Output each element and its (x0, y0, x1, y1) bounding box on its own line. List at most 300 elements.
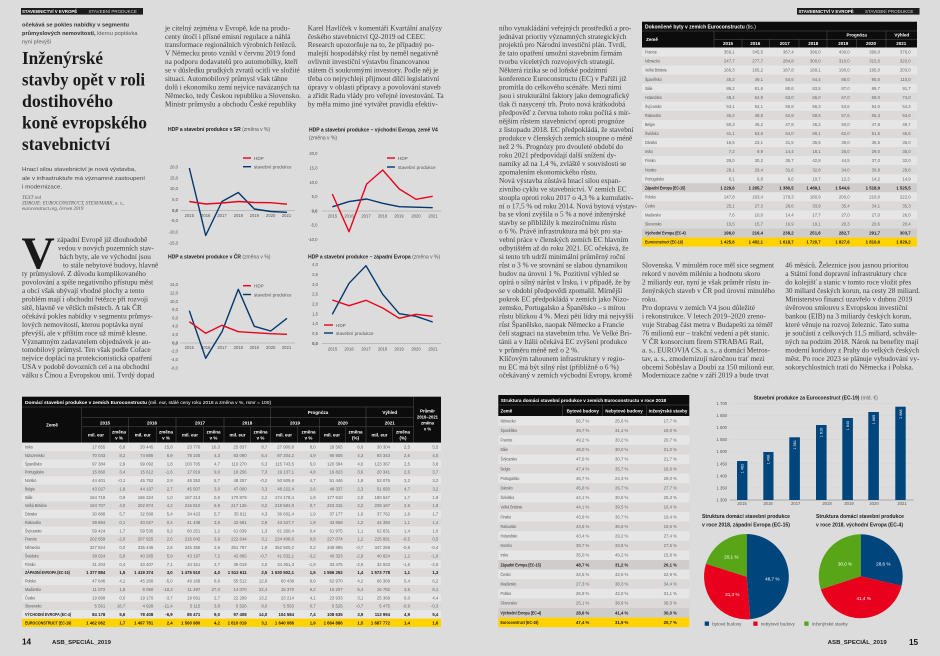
line chart: ČR: 6,0 (172, 315, 179, 320)
table rows: 1,9 (357, 478, 364, 483)
table rows: 17,7 % (664, 418, 677, 423)
table rows: -6,9 (165, 612, 173, 617)
table rows: 4,7 (404, 486, 411, 491)
table rows: 1 229,6 (720, 185, 735, 190)
table rows: 1,1 (357, 528, 364, 533)
table rows: 2,0 (261, 562, 268, 567)
table rows: 167 213 (185, 495, 201, 500)
table rows: 180,9 (810, 194, 821, 199)
line chart: western Europe: 2020 (411, 347, 421, 352)
text column 4: namiky až na 1,4 %, zvláště v souvislosti se (499, 160, 626, 168)
line chart: ČR: 2021 (282, 345, 292, 350)
pie chart: western Europe: 31,3 % (725, 592, 739, 597)
text column 5: rekord v novém miléniu a hodnotu skoro (642, 270, 761, 278)
table rows: 38,7 % (576, 543, 590, 548)
line chart: V4: (změna v %) (309, 136, 337, 142)
table rows: 2,6 (167, 537, 173, 542)
line chart: ČR: stavební produkce (254, 292, 292, 297)
credit: TEXT red (22, 196, 41, 201)
table header (498, 405, 689, 416)
table rows: 0,7 (310, 503, 316, 508)
table rows: 31,9 % (615, 620, 629, 625)
table rows: 69,1 (812, 131, 821, 136)
table rows: 30,0 % (664, 610, 677, 615)
table rows: Německo (645, 58, 661, 64)
table rows: 2,5 (404, 461, 411, 466)
pie chart: eastern Europe: v roce 2018, východní Evropa (EC-4) (816, 523, 903, 529)
text column 5: V ČR konsorcium firem STRABAG Rail, (642, 336, 764, 346)
table rows: 3,1 (357, 595, 364, 600)
text column 1: očekává pokles nabídky v segmentu průmys- (22, 311, 153, 320)
table rows: 35,4 (841, 203, 850, 208)
table rows: 0,1 (119, 520, 126, 525)
line chart: western Europe: 1,0 (312, 321, 319, 326)
table rows: 14,2 (872, 176, 881, 181)
text column 4: pokrok EC předpokládá v zemích jako Nizo- (499, 296, 630, 304)
bar chart: construction output EC-19: 2019 (844, 501, 854, 506)
table rows: 8,0 (261, 604, 268, 609)
table rows: 164 719 (90, 495, 106, 500)
table rows: 35 911 (234, 512, 247, 517)
table rows: Švýcarsko (645, 103, 662, 109)
table rows: Dánsko (25, 511, 38, 517)
folio: page 14 (22, 638, 111, 646)
text column 3: státem či soukromými investory. Podle něj je (308, 67, 438, 75)
line chart: V4: 10,0 (309, 180, 318, 185)
table rows: 1 530 502,1 (271, 570, 295, 575)
table rows: -3,2 (308, 553, 316, 558)
table rows: 35 019 (234, 562, 247, 567)
table rows: 1 610 019 (228, 620, 247, 625)
table rows: 315,0 (869, 59, 881, 64)
pie chart: western Europe (702, 514, 790, 619)
table header: Země (500, 408, 513, 413)
table rows: Česko (500, 571, 511, 577)
table rows: 22,9 % (664, 572, 677, 577)
table rows: -1,6 (165, 470, 173, 475)
table rows: 170 879 (231, 495, 247, 500)
table rows: 15,5 (726, 222, 735, 227)
text column 5: roku. (642, 296, 657, 304)
table rows: 36,0 (841, 140, 850, 145)
table rows: 1,2 (404, 553, 411, 558)
title: dostihového (22, 91, 113, 111)
table rows: 1,8 (167, 461, 173, 466)
table rows: Belgie (25, 486, 36, 492)
table rows: 56,7 % (576, 418, 590, 423)
text column 2: Ministr průmyslu a obchodu České republiky (165, 99, 297, 109)
table rows: 27,3 % (576, 582, 590, 586)
table rows: 27,4 % (664, 534, 677, 538)
table rows: 66,0 (812, 95, 821, 100)
table rows: 1,9 (310, 620, 316, 625)
table rows: 5,4 (404, 578, 411, 584)
table rows: 218 584,0 (275, 503, 295, 508)
table rows: 60 251 (187, 528, 201, 533)
table rows: 23,1 (755, 140, 764, 145)
drop cap: V (22, 228, 55, 278)
table rows: 6,9 (214, 503, 221, 508)
table rows: 95,0 (872, 77, 881, 82)
line chart: V4: 2019 (394, 214, 404, 218)
table header: 2021 (385, 420, 395, 425)
text column 6: a Státní fond dopravní infrastruktury chce (785, 270, 907, 278)
table rows: 0,5 (214, 495, 221, 500)
table rows: 48,5 (755, 113, 764, 118)
table rows: 43,9 % (576, 514, 590, 519)
line chart: SR: -15,0 (168, 240, 179, 246)
table rows: 44 197 (140, 486, 154, 491)
table rows: 207 925 (138, 537, 154, 542)
intro text: očekává se pokles nabídky v segmentu (22, 22, 129, 28)
table rows: 9,0 (214, 612, 221, 617)
line chart: SR: 0,0 (172, 208, 179, 213)
table rows: 67,0 (841, 95, 850, 100)
table rows: 7,1 (167, 562, 173, 567)
table rows: 9,2 (310, 587, 316, 592)
table header: mil. eur (229, 432, 246, 438)
table rows: 0,2 (310, 545, 316, 550)
table rows: ZÁPADNÍ EVROPA (EC-15) (25, 570, 70, 575)
table rows: 123 367 (374, 461, 391, 466)
table rows: 36,7 % (615, 514, 629, 519)
line chart: ČR: 4,0 (172, 324, 179, 329)
text column 4: tánii a v Itálii očekává EC zvýšení produkce (499, 338, 627, 346)
table rows: Česko (25, 595, 36, 600)
table rows: 47 646 (92, 578, 106, 584)
table rows: 51 446 (330, 478, 343, 483)
text column 2: centy útočí i přísné emisní regulace a náhlá (165, 33, 291, 41)
bar chart: construction output EC-19: 1 665 (872, 415, 876, 424)
table rows: 59 535 (140, 528, 154, 533)
line chart: western Europe: HDP (336, 323, 346, 328)
table rows (642, 48, 917, 247)
table rows: 12,3 (841, 176, 850, 181)
table rows: 97 408 (234, 612, 247, 617)
table rows: -2,0 (431, 562, 439, 567)
bar chart: construction output EC-19: 2021 (897, 501, 907, 506)
table rows: Itálie (645, 85, 653, 91)
line chart: V4: stavební produkce (398, 165, 436, 170)
subtitle: ale v infrastruktuře má významné zastoupení (22, 176, 145, 182)
table rows: 7,6 (729, 212, 735, 218)
line chart: ČR: 2015 (185, 345, 195, 350)
table rows: Irsko (500, 552, 509, 558)
table rows: Norsko (500, 543, 512, 548)
table rows: 7,2 (214, 553, 221, 558)
table rows: 1 497 781 (134, 620, 154, 625)
table rows: 14 070 (234, 587, 247, 592)
folio: page 15: ASB_SPECIÁL_2019 (828, 639, 887, 646)
intro text (22, 22, 138, 45)
text column 4: že tato opatření umožní stavebním firmám (499, 50, 622, 58)
text column 4: z listopadu 2018. EC předpokládá, že stavební (499, 126, 634, 134)
table rows: 5,7 (214, 512, 221, 517)
text column 1: válku s Čínou a Evropskou unií. Tvrdý dopad (22, 370, 155, 380)
text column 4: ní o 17,5 % od roku 2014. Nová bytová výstav- (499, 202, 638, 210)
table rows: 4,3 (357, 453, 364, 458)
line chart: western Europe: stavební produkce (336, 331, 374, 336)
table rows: 62,0 (841, 131, 850, 136)
table rows: Polsko (25, 578, 36, 584)
table rows: 37,0 (872, 158, 881, 163)
bar chart: construction output EC-19: 2016 (763, 501, 773, 506)
table rows: -0,7 (356, 545, 364, 550)
table header: Prognóza (308, 410, 329, 415)
table rows: 43 197 (187, 553, 201, 558)
table rows: 6,3 (261, 461, 268, 466)
text column 1: vedou v nových pozemních stav- (58, 244, 154, 252)
text column 5: vuje Strabag část metra v Budapešti za téměř (642, 321, 773, 329)
table rows: Východní Evropa (EC-4) (500, 610, 542, 615)
table rows: 48,4 (726, 95, 735, 100)
table rows: Francie (645, 49, 658, 55)
text column 4: zpomalením ekonomického růstu. (499, 167, 598, 176)
line chart: V4: 2018 (378, 214, 388, 218)
line chart: SR: 20,0 (170, 164, 179, 170)
line chart: western Europe (308, 254, 441, 352)
text column 4: Nová výstavba zůstává hnací silou expan- (499, 176, 621, 185)
table rows: 19,1 (812, 222, 821, 227)
subtitle: i modernizace. (22, 184, 62, 190)
table rows: 21,0 % (664, 447, 677, 452)
text column 4: vební práce v členských zemích EC hlavním (499, 236, 629, 244)
line chart: V4: HDP a stavební produkce – východní Evropa, země V4 (309, 127, 438, 133)
line chart: ČR: 8,0 (172, 307, 179, 312)
line chart: western Europe: 2015 (328, 347, 338, 352)
table rows: 74,0 (902, 95, 911, 100)
table rows: Španělsko (500, 427, 518, 433)
table rows: 15,7 (755, 222, 764, 227)
text column 4: o 6 %. Právě infrastruktura má být pro sta- (499, 228, 623, 236)
table rows: 1,4 (432, 520, 439, 525)
table rows: 43 347,7 (277, 520, 295, 525)
section tag: right page: STAVEBNICTVÍ V EVROPĚ (798, 9, 854, 14)
table rows: 1 377 884 (86, 570, 106, 575)
table rows: 5,6 (119, 612, 126, 617)
table rows: Východní Evropa (EC-4) (645, 230, 686, 236)
table rows: Portugalsko (500, 475, 520, 481)
table rows: 1 810,6 (866, 240, 881, 245)
line chart: SR: 5,0 (172, 197, 179, 202)
table rows: 2,6 (404, 503, 411, 508)
table rows: 59 424 (92, 528, 106, 533)
table rows: 60 438 (281, 578, 295, 584)
line chart: ČR: 2016 (201, 345, 211, 350)
table rows: 29,4 (755, 167, 764, 172)
text column 4: projektů pro Národní investiční plán. Tvrdí, (499, 40, 626, 49)
pie chart: eastern Europe (816, 514, 904, 618)
table rows: 30,6 % (615, 495, 629, 500)
table rows: 48 222,4 (277, 486, 295, 491)
section tag: right page (797, 8, 920, 15)
table rows: 29,0 % (664, 476, 677, 481)
text column 4: růst Španělsko, naopak Německo a Francie (499, 320, 624, 329)
table rows: -2,6 (356, 562, 364, 567)
table rows: 1,7 (432, 512, 439, 517)
table rows: 14,0 (259, 612, 268, 617)
text column 4: konference Euroconstructu (EC) v Paříži již (499, 75, 627, 83)
table rows: Švédsko (500, 495, 515, 500)
table rows: 45,2 (726, 77, 735, 82)
table rows: 26,0 (902, 212, 911, 218)
table rows: 216 810 (185, 503, 201, 508)
table rows: 0,0 (119, 545, 126, 550)
table rows: 1,5 (310, 570, 316, 575)
table header: změna (396, 430, 410, 434)
intro text: průmyslových nemovitostí, kterou poptávka (22, 30, 138, 37)
line chart: western Europe: 2018 (378, 347, 388, 352)
table rows: 54,0 (872, 104, 881, 109)
table rows: 46,2 (726, 113, 735, 118)
table: domestic construction output (22, 397, 441, 627)
table rows: 22,4 (259, 587, 268, 592)
pie legend (705, 621, 849, 626)
table rows: 34 321 (187, 562, 201, 567)
table rows: 1,2 (357, 520, 364, 525)
table rows: 22 299 (234, 595, 247, 600)
table rows: 16,5 (726, 140, 735, 145)
line chart: V4: 15,0 (309, 166, 318, 170)
table rows: 1,8 (310, 520, 316, 525)
text column 4: čelí stagnaci na stavebním trhu. Ve Velké Bri- (499, 329, 632, 337)
table rows: 44,5 (841, 158, 850, 163)
table rows: Maďarsko (645, 212, 662, 218)
table rows: 180 647 (374, 495, 391, 500)
bar chart: construction output EC-19: 1 561 (793, 440, 797, 450)
text column 5: Slovenska. V minulém roce měl sice segment (642, 262, 774, 270)
table rows: 5 475 (379, 604, 391, 609)
table rows: 19 137,1 (277, 470, 295, 475)
table rows: 11 497 (187, 587, 201, 592)
table rows (498, 416, 689, 627)
table rows: 34,1 (872, 203, 881, 208)
table rows: 51 650 (377, 486, 391, 491)
table rows: 3,3 (261, 486, 268, 491)
table rows: 1 265,7 (749, 185, 764, 190)
line chart: V4: HDP (398, 156, 408, 161)
table rows: 20,3 (841, 222, 850, 227)
table rows: 178,3 (783, 194, 794, 199)
table rows: 49 337 (330, 486, 343, 491)
table rows: 217 136 (231, 503, 247, 508)
table rows: 18 256 (234, 470, 247, 475)
table rows: 5 115 (190, 604, 201, 609)
text column 3: třeba co nejrychleji přijmout dílčí legislativní (308, 75, 439, 83)
line chart: V4: 2016 (344, 214, 354, 218)
table rows: 46,7 % (576, 476, 590, 481)
table rows: 18,7 (117, 604, 126, 609)
table rows: -11,4 (163, 604, 173, 609)
text column 6: úvěrovou smlouvu s Evropskou investiční (785, 304, 907, 312)
text column 4: tlak či nasycený trh. Proto nová krátkodobá (499, 101, 626, 109)
line chart: western Europe: 2,5 (312, 292, 319, 297)
table rows: 70 043 (92, 453, 106, 458)
bar chart: construction output EC-19: 1 300 (717, 498, 728, 502)
table rows: -0,1 (118, 478, 126, 483)
table rows: 27,7 % (664, 486, 677, 490)
table rows: 195,0 (869, 68, 881, 73)
text column 4: očekávaný v zemích východní Evropy, kromě (499, 372, 632, 380)
table rows: 61 039 (234, 528, 247, 533)
table rows: 45,2 (755, 122, 764, 127)
table rows: -0,5 (403, 537, 411, 542)
line chart: V4: 2020 (411, 214, 421, 218)
table rows: Velká Británie (25, 503, 47, 508)
table rows: 20,7 % (664, 438, 677, 442)
table rows: 5,5 (432, 445, 439, 450)
table rows: -0,4 (431, 545, 439, 550)
pie legend: inženýrské stavby (812, 621, 849, 626)
table header: změna (253, 430, 268, 434)
text column 3: by měla mimo jiné vytvářet pravidla efektiv- (308, 101, 438, 109)
table rows: Německo (500, 418, 516, 423)
bar chart: construction output EC-19: 1 610 (820, 428, 824, 437)
line chart: western Europe: 3,0 (312, 282, 319, 287)
table rows: 5,8 (119, 553, 126, 558)
table rows: Velká Británie (645, 67, 667, 73)
table rows: 0,2 (167, 528, 173, 533)
table rows: 26,7 % (615, 486, 629, 490)
text column 4: tvorbu víceletých rozvojových strategií. (499, 58, 615, 66)
table rows: 30 304 (377, 445, 391, 450)
table rows: 30,2 (755, 158, 764, 163)
line chart: V4: -5,0 (310, 222, 318, 228)
table rows: 28,0 (726, 158, 735, 163)
table rows: Nizozemsko (25, 453, 45, 458)
table rows: 3,9 (357, 612, 364, 617)
table rows: 37 762 (377, 512, 391, 517)
table rows: -1,6 (403, 562, 411, 567)
table header: Země (646, 37, 658, 42)
table rows: 83 090 (234, 453, 247, 458)
table rows: 20,7 % (664, 620, 677, 625)
text column 1: USA v podobě dovozních cel a na obchodní (22, 363, 149, 371)
table rows: 1,1 (404, 520, 411, 525)
table title: Struktura domácí stavební produkce v zemích Euroconstructu v roce 2018 (501, 398, 667, 403)
text column 4: nu EC má být silný růst (přibližně o 6 %) (499, 362, 619, 371)
table rows: 223 315 (327, 503, 343, 508)
table rows: 58,5 (812, 113, 821, 118)
pie chart: eastern Europe: 30,0 % (838, 562, 852, 567)
line chart: V4 (308, 127, 441, 242)
table rows: 53 076 (377, 478, 391, 483)
table rows: 49,7 % (576, 428, 590, 433)
text column 6: moderní koridory z Prahy do velkých českých (785, 346, 919, 354)
table rows: 34 351,3 (277, 562, 295, 567)
table rows: Švýcarsko (500, 456, 518, 462)
table rows: 0,9 (119, 495, 126, 500)
table header: změna (112, 430, 126, 434)
text column 3: Karel Havlíček v komentáři Kvartální analýzy (308, 24, 442, 32)
table rows: 66 368 (377, 578, 391, 584)
text column 4: si tento trh udrží minimální průměrný roční (499, 252, 625, 261)
table rows: 10,0 (755, 212, 764, 218)
table rows: Maďarsko (25, 586, 42, 592)
table rows: 0,0 (119, 595, 126, 600)
table rows: 15,8 % (664, 553, 677, 558)
title: Inženýrské (22, 48, 103, 68)
table rows: 42,6 % (615, 572, 629, 577)
text column 4: růstu blízkou 4 %. Mezi pěti lídry má nejvyšší (499, 311, 633, 320)
line chart: western Europe: 0,0 (312, 341, 319, 346)
table rows: 23 214 (281, 595, 295, 600)
table rows: 28,6 (785, 203, 794, 208)
table rows: 47,8 (785, 122, 794, 127)
table rows: 35,5 (812, 140, 821, 145)
table rows: 55 512 (234, 578, 247, 584)
table rows: 42,8 (812, 158, 821, 163)
